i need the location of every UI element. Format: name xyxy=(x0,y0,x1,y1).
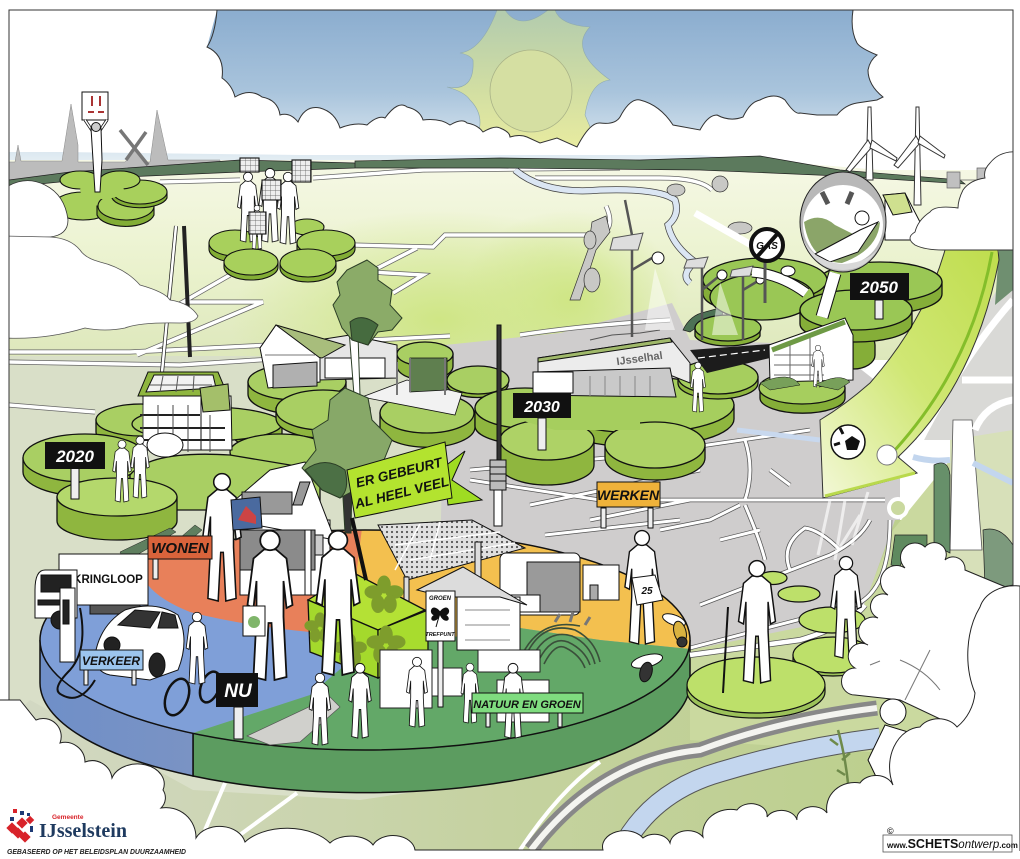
platforms 2030 xyxy=(475,360,758,485)
hiker near 2030 building xyxy=(690,362,706,412)
magnifier with relaxing person xyxy=(800,172,886,317)
icon: no gas sign xyxy=(751,229,783,303)
land: right city strip xyxy=(916,290,1012,440)
land: city area xyxy=(440,303,900,650)
wilg tunnel xyxy=(522,612,600,668)
futuristic building xyxy=(500,553,619,615)
sign: natuur en groen: NATUUR EN GROEN xyxy=(473,699,582,711)
child reaching in tree xyxy=(868,699,918,785)
banner: er gebeurt al heel veel xyxy=(347,442,482,580)
grey towers xyxy=(947,168,990,188)
arrow head stripe xyxy=(825,473,915,496)
sector: werken xyxy=(345,520,700,665)
cloud band xyxy=(9,10,1013,170)
road right side xyxy=(950,420,982,550)
bush patch xyxy=(891,535,927,567)
icon: sun xyxy=(447,10,610,150)
platform 2020 main xyxy=(57,478,177,540)
sign: werken xyxy=(597,482,660,528)
people on disc xyxy=(203,474,659,745)
river xyxy=(515,170,695,283)
hedge left xyxy=(120,525,202,562)
small house xyxy=(417,567,527,650)
tree: behind mid house xyxy=(333,260,402,395)
land: distant fields xyxy=(9,160,1013,360)
sign: natuur en groen xyxy=(472,693,583,727)
big disc side blue xyxy=(40,640,193,776)
river lower fill xyxy=(620,738,880,852)
apartment building xyxy=(760,318,853,390)
figure 2030 building: IJsselhal xyxy=(616,350,663,368)
dark strip beside arrow xyxy=(995,250,1013,305)
source caption text: GEBASEERD OP HET BELEIDSPLAN DUURZAAMHEID xyxy=(7,849,186,856)
clover platform with people holding panels xyxy=(209,158,355,282)
white below frame xyxy=(0,851,1020,859)
garden boxes xyxy=(380,650,549,722)
field roads white xyxy=(9,168,712,412)
credit: schetsontwerp: www.SCHETSontwerp.com xyxy=(886,837,1018,851)
ring beside ball xyxy=(877,445,897,465)
bush strip xyxy=(934,463,950,553)
logo: gemeente ijsselstein: Gemeente xyxy=(52,814,84,821)
sign: nu xyxy=(216,673,258,739)
land: right strip field xyxy=(950,430,1012,578)
big disc top xyxy=(30,520,710,770)
motorway band white xyxy=(531,708,877,850)
cloud: right middle xyxy=(910,152,1020,250)
icon: bee small xyxy=(630,651,664,683)
canal xyxy=(737,430,820,440)
roundabout xyxy=(889,499,907,517)
green cube with flowers xyxy=(304,572,428,678)
crane xyxy=(162,226,190,372)
sign: 2030: 2030 xyxy=(523,399,560,416)
white tree lower right xyxy=(842,543,1013,727)
road network xyxy=(470,430,890,648)
white pipe xyxy=(752,272,806,293)
electric car xyxy=(95,606,184,680)
cloud band outline xyxy=(207,10,883,147)
number card 25: 25 xyxy=(640,586,653,597)
banner: er gebeurt al heel veel: ER GEBEURT xyxy=(354,454,445,491)
hedges in distance xyxy=(570,176,752,300)
sign: 2020: 2020 xyxy=(55,447,94,466)
cyclist xyxy=(160,612,224,719)
banner: er gebeurt al heel veel: AL HEEL VEEL xyxy=(352,474,450,512)
logo: gemeente ijsselstein xyxy=(6,809,127,843)
road around right meadow white xyxy=(690,605,865,655)
small house behind magnifier xyxy=(883,193,920,240)
lit road under arrow xyxy=(818,492,868,560)
sign: 2050: 2050 xyxy=(859,278,898,297)
credit: schetsontwerp: © xyxy=(887,826,894,836)
playground on platform xyxy=(362,358,462,415)
white pipe fill xyxy=(752,272,806,293)
rock xyxy=(147,433,183,457)
road markings xyxy=(698,350,765,358)
clover platform top-left xyxy=(53,171,167,226)
sign: wonen: WONEN xyxy=(151,540,210,557)
sign: verkeer xyxy=(80,650,143,685)
plant vine xyxy=(830,730,850,783)
cloud: left blob xyxy=(5,181,68,237)
sign: nu: NU xyxy=(224,681,253,702)
skyline churches and windmill xyxy=(9,104,220,180)
tree: beside banner xyxy=(302,388,392,533)
bushes dark xyxy=(683,307,723,332)
big arrow to 2050 xyxy=(820,250,999,498)
stream right xyxy=(913,457,1013,483)
sign: groen trefpunt: TREFPUNT xyxy=(425,632,455,638)
land: meadow below city xyxy=(690,463,950,752)
tower xyxy=(490,325,506,526)
people right meadow xyxy=(723,557,861,693)
big disc outline xyxy=(40,530,690,750)
sector: natuur en groen xyxy=(193,628,700,770)
road with bushes xyxy=(694,210,750,248)
river fill xyxy=(515,170,695,283)
sector: wonen xyxy=(140,520,380,640)
street lamps and turbines xyxy=(610,200,764,340)
road around right meadow xyxy=(690,605,865,655)
runners on 2020 platform xyxy=(113,436,149,502)
solar roof xyxy=(378,520,525,602)
house: mid platform xyxy=(260,325,397,388)
river lower xyxy=(620,738,880,852)
charging post xyxy=(58,588,95,698)
bottom roads xyxy=(205,762,600,850)
icon: bee large xyxy=(661,611,689,647)
icon: football xyxy=(831,425,865,459)
field roads xyxy=(9,168,712,412)
sign: 2050 xyxy=(850,273,909,319)
person holding sign on clover xyxy=(82,92,108,192)
shopping bag xyxy=(243,606,265,636)
sign: verkeer: VERKEER xyxy=(82,654,140,668)
small discs right xyxy=(687,572,873,718)
arrow edge stripe xyxy=(895,252,992,450)
icon: no gas sign: GAS xyxy=(756,241,778,252)
sky xyxy=(10,10,882,160)
truck kringloop xyxy=(35,554,148,629)
big disc side green xyxy=(193,640,690,793)
ditch xyxy=(247,697,340,745)
light beam second xyxy=(712,282,738,335)
cloud: bottom border xyxy=(0,586,1020,859)
number card 25 xyxy=(632,575,663,605)
tree branches xyxy=(870,650,940,700)
figure 2030 building xyxy=(533,338,690,397)
house: wonen xyxy=(235,462,335,595)
land: bottom fields xyxy=(9,520,905,850)
small badge xyxy=(781,266,795,276)
sign: groen trefpunt: GROEN xyxy=(429,596,452,602)
credit: schetsontwerp xyxy=(883,826,1018,852)
light beam xyxy=(645,268,675,330)
tablet with house xyxy=(231,497,262,530)
platform group 2020 back lobes xyxy=(23,342,509,510)
sign: wonen xyxy=(148,536,212,579)
motorway band xyxy=(531,708,877,850)
bush right xyxy=(983,529,1013,590)
platforms 2050 xyxy=(695,258,942,413)
sign: groen trefpunt xyxy=(425,591,455,707)
truck kringloop: KRINGLOOP xyxy=(73,574,143,586)
sector: verkeer xyxy=(30,520,710,760)
sign: werken: WERKEN xyxy=(597,487,660,503)
road network white xyxy=(470,430,890,648)
black road xyxy=(690,344,770,373)
sign: 2020 xyxy=(45,442,105,499)
land: green glow left field xyxy=(258,221,562,348)
house: 2020 platform xyxy=(138,372,232,452)
grey buildings behind xyxy=(590,330,660,340)
land: green glow centre field xyxy=(492,219,666,338)
wind turbines xyxy=(846,107,945,205)
sign: 2030 xyxy=(513,393,571,450)
cloud: left lower xyxy=(5,236,198,338)
land: left margin xyxy=(10,356,442,800)
road right arcs xyxy=(915,300,1013,450)
logo: gemeente ijsselstein: IJsselstein xyxy=(39,820,127,842)
treeline xyxy=(9,156,965,187)
